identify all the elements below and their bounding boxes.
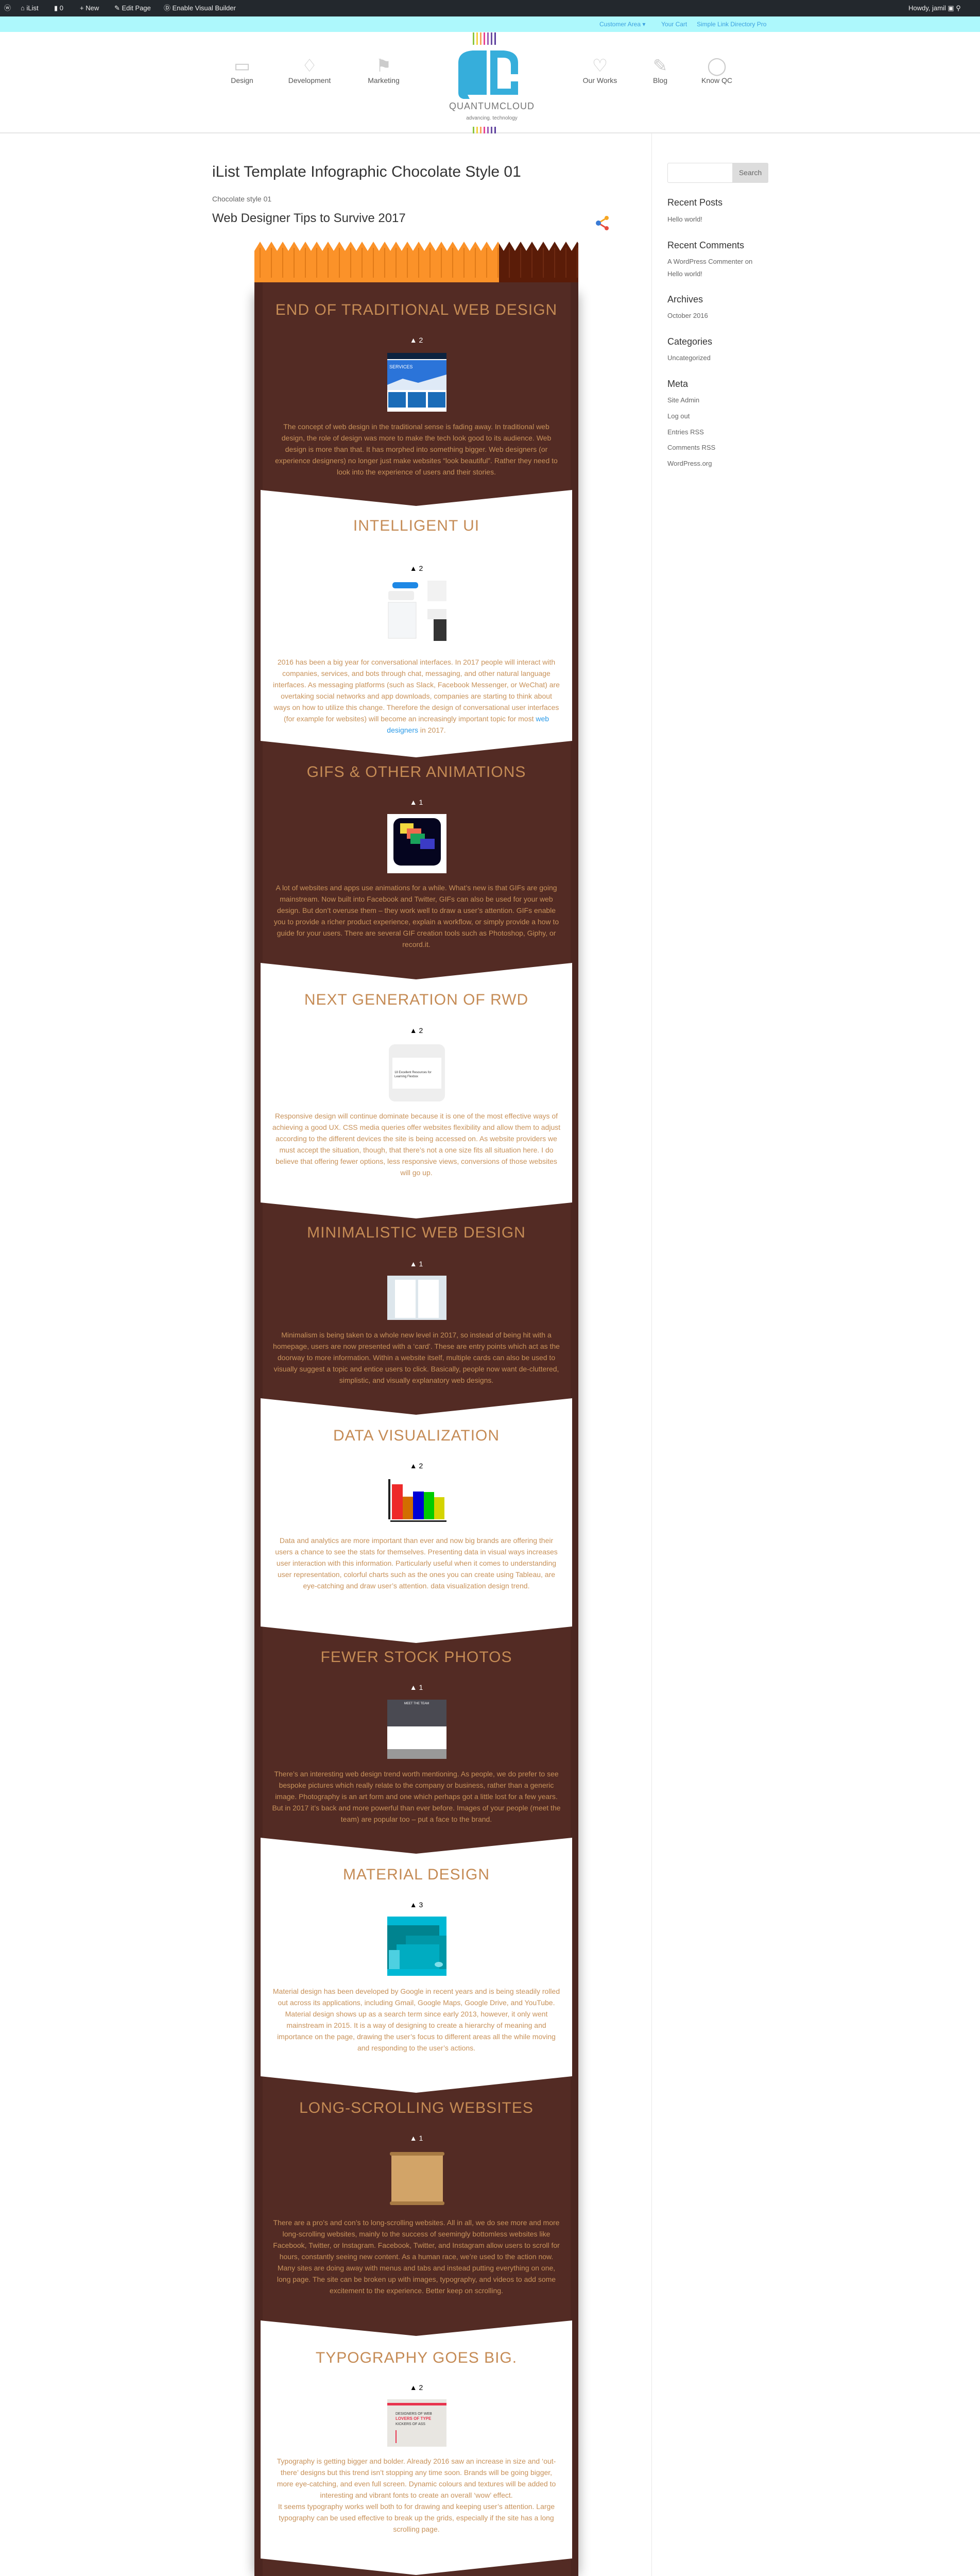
section: next generation of RWD: ▲ 2	[410, 1026, 423, 1035]
section: gifs: GIFS & OTHER ANIMATIONS	[307, 764, 526, 781]
image: scroll	[390, 2152, 444, 2205]
section: material design: Material design has been developed by Google in recent years and is being steadily rolled out across its applications, including Gmail, Google Maps, Google Drive, and YouTube. Material design shows up as a search term since early 2013, however, it only went mainstream in 2015. It is a way of designing to create a hierarchy of meaning and importance on the page, drawing the user’s focus to different areas all the while moving and responding to the user’s actions.	[273, 1987, 560, 2052]
white panels	[261, 490, 572, 2575]
sidebar widgets: Archives	[667, 294, 703, 304]
search box	[667, 163, 768, 183]
section: gifs: A lot of websites and apps use animations for a while. What’s new is that GIFs are going mainstream. Now built into Facebook and Twitter, GIFs can also be used for your web design. But don’t overuse them – they work well to draw a user’s attention. GIFs enable you to provide a richer product experience, explain a workflow, or simply provide a how to guide for your users. There are several GIF creation tools such as Photoshop, Giphy, or record.it.	[274, 884, 559, 948]
image: cards	[387, 1276, 446, 1320]
image: phone screenshot	[389, 1044, 445, 1101]
image: chat screenshot	[388, 581, 446, 641]
section: end of traditional web design: ▲ 2	[410, 336, 423, 344]
sidebar widgets: October 2016	[667, 312, 708, 319]
section: minimalistic web design: MINIMALISTIC WEB DESIGN	[307, 1224, 526, 1241]
section: data visualization: Data and analytics are more important than ever and now big brands are offering their users a chance to see the stats for themselves. Presenting data in visual ways increases user interaction with this information. Particularly useful when it comes to understanding user representation, colorful charts such as the ones you can create using Tableau, are eye-catching and draw user’s attention. data visualization design trend.	[275, 1536, 558, 1590]
sidebar widgets: Hello world!	[667, 270, 702, 278]
page title: iList Template Infographic Chocolate Style 01	[212, 163, 521, 180]
top bar links: Customer Area ▾	[599, 21, 645, 28]
section: typography goes big: It seems typography works well both to for drawing and keeping user’s attention. Large typography can be used effective to break up the grids, especially if the site has a long scrolling page.	[278, 2502, 555, 2533]
image: phone screenshot: 18 Excellent Resources for	[394, 1071, 432, 1074]
sidebar widgets: Meta	[667, 379, 688, 389]
sidebar widgets: Entries RSS	[667, 428, 704, 436]
image: gif icon	[387, 814, 446, 873]
section: intelligent UI: INTELLIGENT UI	[353, 517, 479, 534]
header nav	[0, 32, 980, 133]
nav items: ▭	[234, 56, 250, 76]
subtitle: Chocolate style 01	[212, 195, 271, 203]
sidebar widgets: Recent Comments	[667, 240, 744, 250]
section: data visualization	[275, 1427, 558, 1590]
section: long-scrolling websites: There are a pro’s and con’s to long-scrolling websites. All in all, we do see more and more long-scrolling websites, mainly to the success of seemingly bottomless websites like Facebook, Twitter, or Instagram. Facebook, Twitter, and Instagram allow users to scroll for hours, constantly seeing new content. As a human race, we’re used to the action now. Many sites are doing away with menus and tabs and instead putting everything on one, long page. The site can be broken up with images, typography, and videos to add some excitement to the experience. Better keep on scrolling.	[273, 2218, 560, 2295]
chart: bar image	[388, 1479, 446, 1522]
sidebar widgets	[667, 197, 752, 467]
image: services screenshot	[387, 353, 446, 412]
icon: share	[596, 216, 609, 230]
section: fewer stock photos: FEWER STOCK PHOTOS	[321, 1649, 512, 1666]
section: typography goes big	[277, 2349, 556, 2533]
section: fewer stock photos: There’s an interesting web design trend worth mentioning. As people, we do prefer to see bespoke pictures which really relate to the company or business, rather than a generic image. Photography is an art form and one which perhaps got a little lost for a few years. But in 2017 it’s back and more powerful than ever before. Images of your people (meet the team) are popular too – put a face to the brand.	[272, 1770, 561, 1823]
logo: QUANTUMCLOUD	[449, 101, 535, 111]
image: typography: LOVERS OF TYPE	[396, 2416, 432, 2421]
admin bar: ⓦ	[4, 4, 11, 12]
section: long-scrolling websites: LONG-SCROLLING WEBSITES	[299, 2099, 534, 2116]
section: gifs: ▲ 1	[410, 798, 423, 806]
header nav: ✎	[653, 56, 667, 76]
section: typography goes big: TYPOGRAPHY GOES BIG.	[316, 2349, 517, 2366]
sidebar widgets: WordPress.org	[667, 460, 712, 467]
section: minimalistic web design: Minimalism is being taken to a whole new level in 2017, so instead of being hit with a homepage, users are now presented with a ‘card’. These are entry points which act as the doorway to more information. Within a website itself, multiple cards can also be used to visually suggest a topic and entice users to click. Basically, people now want de-cluttered, simplistic, and visually explanatory web designs.	[273, 1331, 560, 1384]
sidebar widgets: Hello world!	[667, 215, 702, 223]
section: end of traditional web design	[275, 301, 558, 476]
logo: advancing. technology	[466, 115, 518, 121]
header nav: Development	[288, 76, 331, 84]
admin bar: ▮ 0	[54, 4, 63, 12]
section: data visualization: ▲ 2	[410, 1462, 423, 1470]
sidebar widgets: Uncategorized	[667, 354, 711, 362]
top bar links	[0, 16, 980, 32]
admin bar: Ⓓ Enable Visual Builder	[164, 4, 236, 12]
sidebar widgets: Categories	[667, 336, 712, 347]
section: material design	[273, 1866, 560, 2052]
admin bar: Howdy, jamil ▣ ⚲	[908, 4, 961, 12]
section: fewer stock photos	[272, 1649, 561, 1823]
section: end of traditional web design: END OF TRADITIONAL WEB DESIGN	[276, 301, 557, 318]
section: typography goes big: Typography is getting bigger and bolder. Already 2016 saw an increase in size and ‘out-there’ designs but this trend isn’t stopping any time soon. Brands will be going bigger, more eye-catching, and even full screen. Dynamic colours and textures will be added to interesting and vibrant fonts to create an overall ‘wow’ effect.	[277, 2457, 556, 2499]
section: material design: ▲ 3	[410, 1901, 423, 1909]
section: intelligent UI: 2016 has been a big year for conversational interfaces. In 2017 people will interact with companies, services, and bots through chat, messaging, and other natural language interfaces. As messaging platforms (such as Slack, Facebook Messenger, or WeChat) are overtaking social networks and app downloads, companies are starting to think about ways on how to utilize this change. Therefore the design of conversational user interfaces (for example for websites) will become an increasingly important topic for most web designers in 2017.	[273, 658, 560, 734]
section: intelligent UI: ▲ 2	[410, 564, 423, 572]
section: next generation of RWD: Responsive design will continue dominate because it is one of the most effective ways of achieving a good UX. CSS media queries offer websites flexibility and allow them to adjust according to the different devices the site is being accessed on. As website providers we must accept the situation, though, that there’s not a one size fits all situation here. I do believe that offering fewer options, less responsive views, conversions of those websites will go up.	[272, 1112, 560, 1177]
sidebar widgets: Site Admin	[667, 396, 699, 404]
section: material design: MATERIAL DESIGN	[343, 1866, 490, 1883]
section: next generation of RWD: NEXT GENERATION OF RWD	[304, 991, 528, 1008]
header nav: Know QC	[701, 76, 732, 84]
section: intelligent UI	[273, 517, 560, 734]
top bar links: Simple Link Directory Pro	[697, 21, 766, 28]
image: services screenshot: SERVICES	[389, 364, 412, 369]
image: material	[387, 1917, 446, 1976]
section: long-scrolling websites: ▲ 1	[410, 2134, 423, 2142]
header nav: ⚑	[376, 56, 391, 76]
sidebar widgets: Log out	[667, 412, 690, 420]
header nav: Blog	[653, 76, 667, 84]
section: long-scrolling websites	[273, 2099, 560, 2295]
nav items	[231, 56, 253, 84]
image: meet the team: MEET THE TEAM	[404, 1702, 429, 1705]
sidebar	[667, 163, 768, 183]
sidebar widgets: Comments RSS	[667, 444, 715, 451]
infographic body	[247, 242, 586, 2576]
section: gifs	[274, 764, 559, 948]
admin bar: + New	[80, 4, 99, 12]
header nav: ♢	[302, 56, 317, 76]
section: data visualization: DATA VISUALIZATION	[333, 1427, 500, 1444]
image: typography: DESIGNERS OF WEB	[396, 2412, 432, 2416]
header nav: ◯	[707, 56, 727, 76]
header nav: ♡	[592, 56, 608, 76]
image: phone screenshot: Learning Flexbox	[394, 1075, 418, 1078]
sidebar widgets: Recent Posts	[667, 197, 723, 208]
section: next generation of RWD	[272, 991, 560, 1177]
section: minimalistic web design: ▲ 1	[410, 1260, 423, 1268]
admin bar: ⌂ iList	[21, 4, 39, 12]
section: fewer stock photos: ▲ 1	[410, 1683, 423, 1691]
header nav: Our Works	[583, 76, 617, 84]
image: typography	[387, 2399, 446, 2447]
admin bar	[0, 0, 980, 16]
image: meet the team	[387, 1700, 446, 1759]
admin bar: ✎ Edit Page	[114, 4, 151, 12]
section: typography goes big: ▲ 2	[410, 2383, 423, 2392]
logo	[449, 32, 535, 133]
infographic heading: Web Designer Tips to Survive 2017	[212, 211, 406, 225]
image: typography: KICKERS OF ASS	[396, 2422, 425, 2426]
section: end of traditional web design: The concept of web design in the traditional sense is fading away. In traditional web design, the role of design was more to make the tech look good to its audience. Web design is more than that. It has morphed into something bigger. Web designers (or experience designers) no longer just make websites “look beautiful”. Rather they need to look into the experience of users and their stories.	[275, 422, 558, 476]
header nav: Marketing	[368, 76, 400, 84]
nav items: Design	[231, 76, 253, 84]
sidebar divider	[651, 133, 652, 2576]
sidebar widgets: A WordPress Commenter on	[667, 258, 752, 265]
sidebar: Search	[739, 168, 762, 177]
top bar links: Your Cart	[661, 21, 687, 28]
top wrapper zigzag	[254, 242, 578, 282]
section: minimalistic web design	[273, 1224, 560, 1384]
